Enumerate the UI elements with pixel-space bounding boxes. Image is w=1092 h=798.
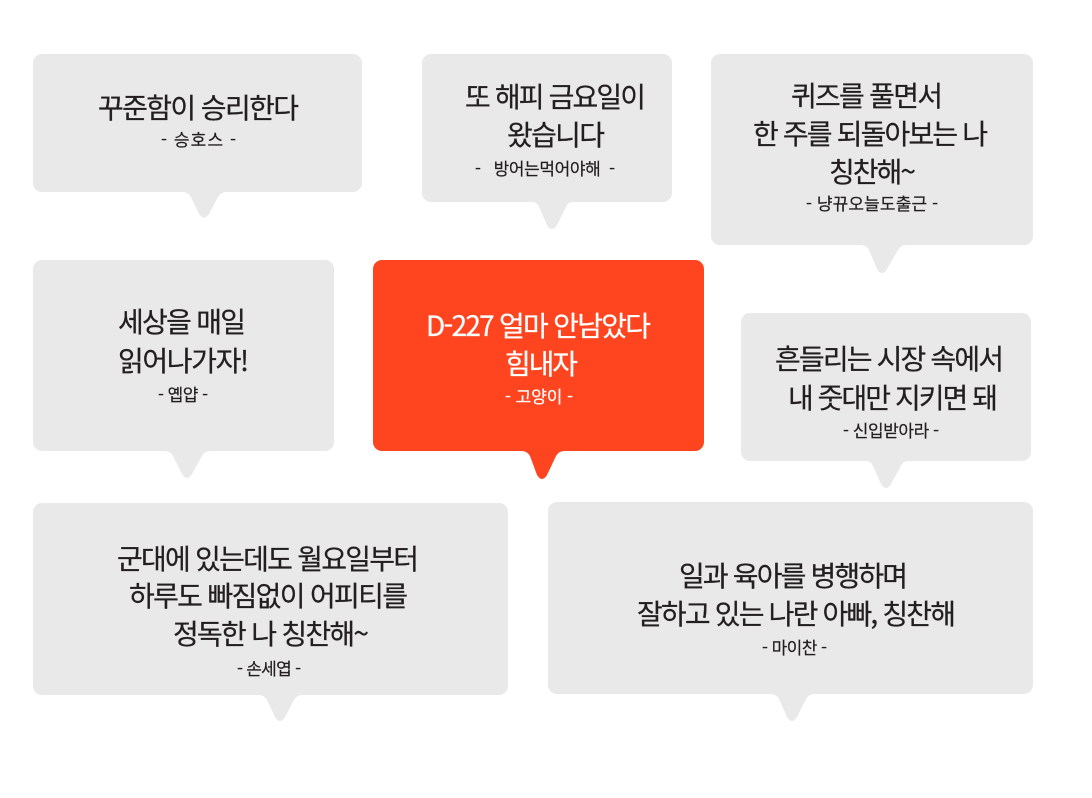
speech bubble: 손세엽: 군대에 있는데도 월요일부터 [117,538,419,578]
speech bubble: 방어는먹어야해 [422,54,672,229]
speech bubble: 방어는먹어야해: 또 해피 금요일이 [465,76,646,116]
speech bubble: 냥뀨오늘도출근: 한 주를 되돌아보는 나 [753,113,988,153]
speech bubble: 신입받아라 [741,313,1031,488]
speech bubble: 승호스 [33,54,362,218]
speech bubble: 마이찬 [548,502,1033,721]
highlighted speech bubble: 고양이: - 고양이 - [505,383,573,408]
speech bubble: 마이찬: - 마이찬 - [762,634,827,659]
highlighted speech bubble: 고양이: D-227 얼마 안남았다 [426,305,651,345]
speech bubble: 옙얍: 세상을 매일 [118,301,246,341]
speech bubble: 마이찬: 잘하고 있는 나란 아빠, 칭찬해 [637,593,956,633]
speech bubble: 옙얍: 읽어나가자! [118,340,249,380]
speech bubble: 마이찬: 일과 육아를 병행하며 [679,555,908,595]
speech bubble: 방어는먹어야해: - 방어는먹어야해 - [475,155,615,180]
speech bubble: 손세엽: - 손세엽 - [237,655,301,680]
speech bubble: 승호스: 꾸준함이 승리한다 [98,87,299,127]
speech bubble: 냥뀨오늘도출근 [711,54,1033,273]
speech bubble: 방어는먹어야해: 왔습니다 [507,114,605,154]
speech bubble: 냥뀨오늘도출근: - 냥뀨오늘도출근 - [806,190,938,215]
speech bubble: 냥뀨오늘도출근: 퀴즈를 풀면서 [791,75,943,115]
speech bubble: 옙얍 [33,260,334,478]
speech bubble: 승호스: - 승호스 - [161,126,236,151]
speech bubble: 옙얍: - 옙얍 - [158,381,208,406]
speech bubble: 신입받아라: 내 줏대만 지키면 돼 [788,377,998,417]
speech bubble: 손세엽: 정독한 나 칭찬해~ [173,613,369,653]
speech bubble: 신입받아라: - 신입받아라 - [843,417,939,442]
speech bubble: 손세엽 [33,503,508,721]
speech bubble: 냥뀨오늘도출근: 칭찬해~ [829,151,916,191]
speech bubble: 손세엽: 하루도 빠짐없이 어피티를 [129,575,408,615]
speech bubble: 신입받아라: 흔들리는 시장 속에서 [775,338,1004,378]
highlighted speech bubble: 고양이 [373,260,704,479]
highlighted speech bubble: 고양이: 힘내자 [505,343,578,383]
